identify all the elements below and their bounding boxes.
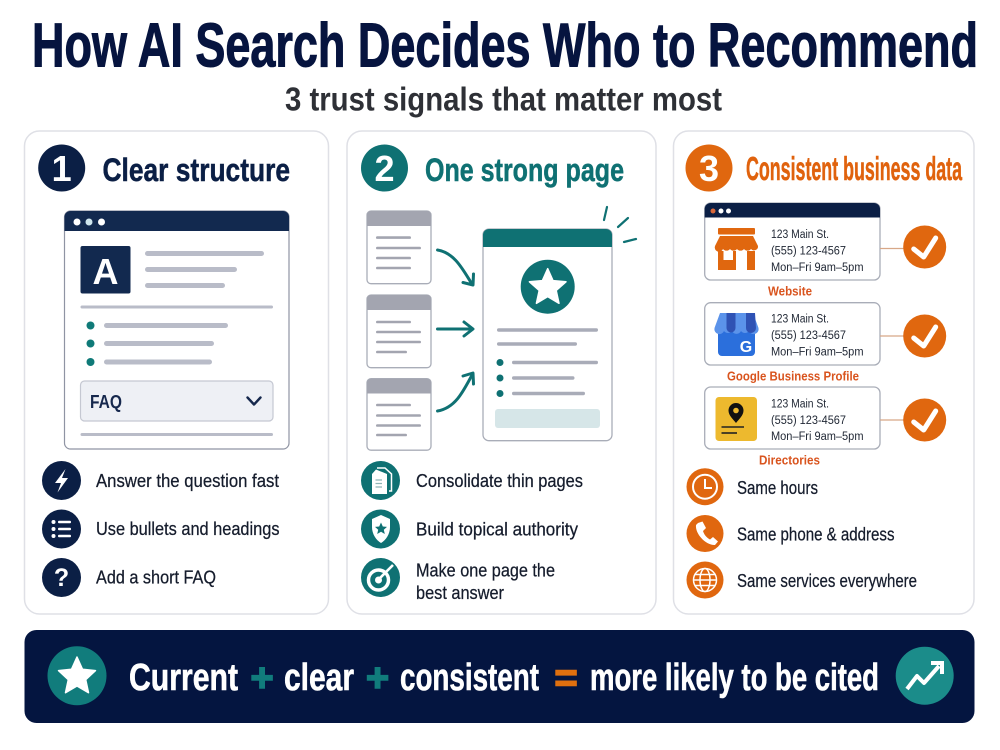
item: make one page the best answer: best answer [416,582,504,603]
formula text: + [250,656,274,700]
card: website listing: Mon–Fri 9am–5pm [771,262,864,274]
illustration: thin pages merging into one page [367,207,636,450]
item: consolidate thin pages [361,461,583,500]
card: directories listing: (555) 123-4567 [771,415,846,427]
item: same hours: Same hours [737,477,818,498]
icon: trending up arrow [896,647,954,705]
item: add a short faq: Add a short FAQ [96,566,216,588]
check: directories verified [880,398,946,442]
item: make one page the best answer [361,558,555,603]
footer banner [24,630,974,723]
number badge 2: 2 [374,148,395,189]
number badge 3 [686,144,732,192]
icon: star badge [48,646,106,705]
item: build topical authority: Build topical authority [416,518,579,540]
item: consolidate thin pages: Consolidate thin pages [416,470,583,491]
formula text: more likely to be cited [590,657,879,699]
illustration: structured web page [64,211,289,449]
item: same hours [686,468,818,505]
heading: one strong page: One strong page [425,152,624,188]
item: build topical authority [361,510,579,548]
card: directories listing: 123 Main St. [771,398,829,410]
subtitle: 3 trust signals that matter most [285,81,722,118]
heading: clear structure: Clear structure [102,152,290,188]
item: same services everywhere [686,562,917,598]
card: directories listing: Mon–Fri 9am–5pm [771,431,864,443]
formula text: clear [284,657,354,699]
number badge 2 [361,144,408,192]
label: website: Website [768,284,812,298]
item: same phone and address [686,515,894,552]
icon: google store: G [740,339,752,356]
panel: consistent business data [674,131,974,614]
card: directories listing [705,387,880,449]
card: google business profile listing: (555) 123-4567 [771,330,846,342]
panel: clear structure [24,131,328,614]
illustration: structured web page: A [92,251,118,292]
number badge 1: 1 [52,148,72,189]
label: directories: Directories [759,452,820,468]
item: use bullets and headings: Use bullets and headings [96,518,280,539]
card: google business profile listing: 123 Main St. [771,314,829,326]
icon: map pin on directory [716,397,757,441]
number badge 3: 3 [699,148,719,189]
item: add a short faq: ? [54,564,69,592]
formula text [129,656,879,700]
item: answer the question fast [42,461,279,500]
check: website verified [880,226,946,268]
item: add a short faq [42,558,216,597]
item: same services everywhere: Same services everywhere [737,570,917,591]
card: website listing: (555) 123-4567 [771,246,846,258]
panel: one strong page [347,131,656,614]
check: google profile verified [880,314,946,358]
item: same phone and address: Same phone & address [737,524,894,544]
item: make one page the best answer: Make one page the [416,560,555,580]
formula text: + [366,656,389,700]
card: google business profile listing: Mon–Fri 9am–5pm [771,347,864,359]
formula text: = [554,656,578,700]
card: website listing [705,203,880,280]
number badge 1 [38,144,85,192]
illustration: structured web page: FAQ [90,392,122,412]
formula text: Current [129,657,238,699]
icon: storefront [715,228,758,270]
item: use bullets and headings [42,510,280,548]
item: answer the question fast: Answer the question fast [96,470,279,491]
icon: google store [714,313,759,356]
formula text: consistent [400,657,539,699]
card: google business profile listing [705,303,880,365]
label: google business profile: Google Business Profile [727,368,859,384]
card: website listing: 123 Main St. [771,229,829,241]
